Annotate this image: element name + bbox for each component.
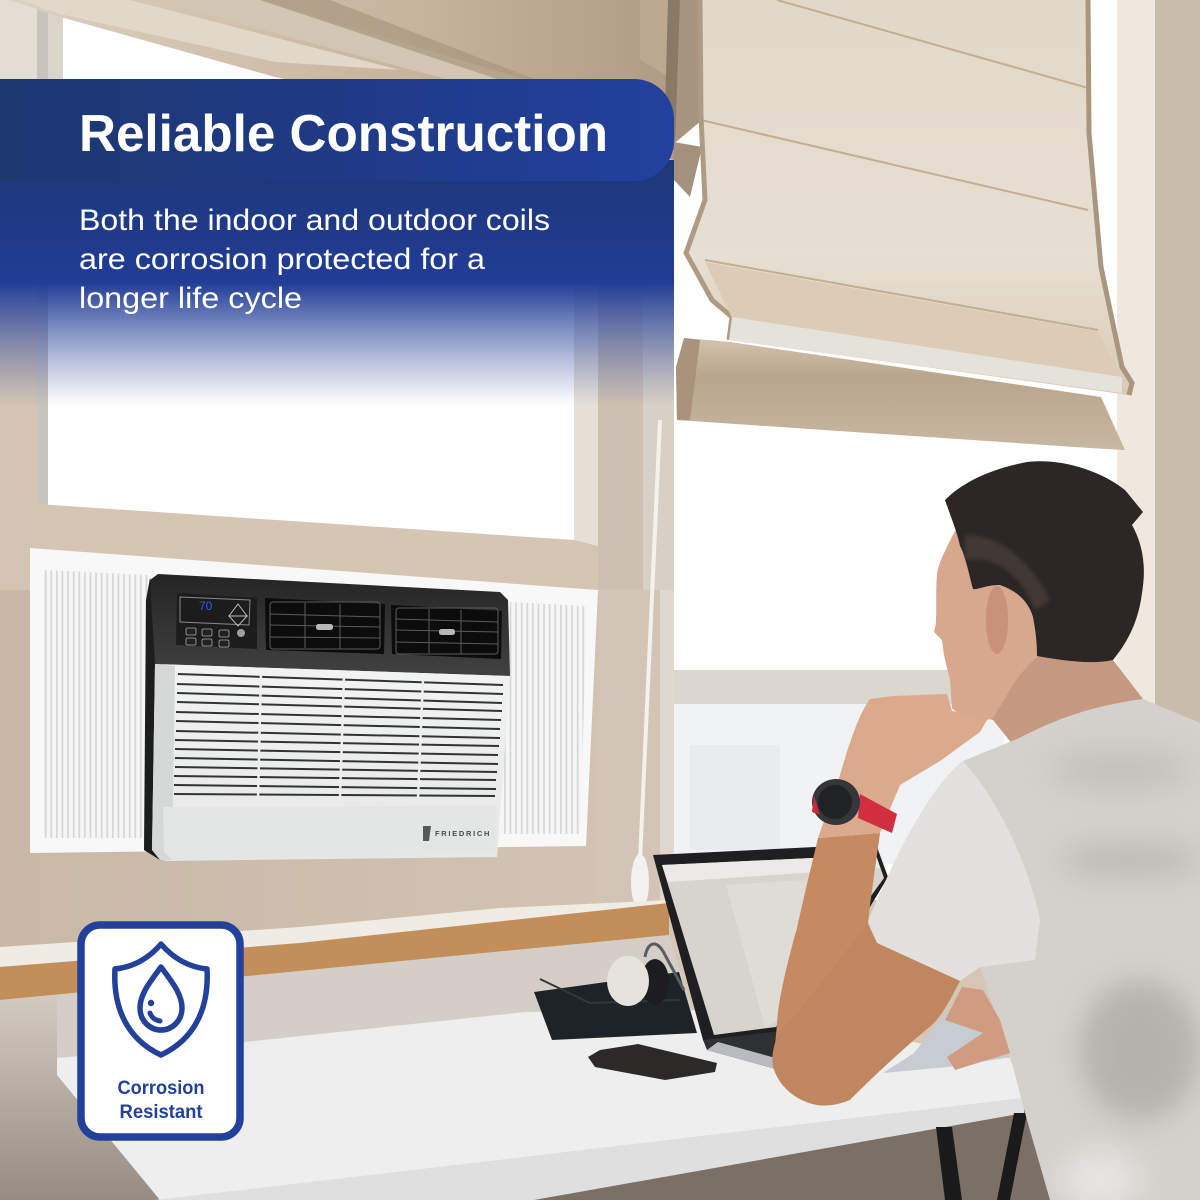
window side panels for air conditioner: [30, 548, 598, 853]
white grille body: [152, 664, 510, 861]
face: [934, 520, 1040, 720]
person: [772, 461, 1200, 1200]
forearm: [773, 833, 880, 1067]
control display: [176, 593, 257, 649]
notebook and headphones: [534, 944, 697, 1040]
under-desk shadow: [500, 1105, 1060, 1200]
hand at chin: [818, 694, 987, 838]
lower front panel: [163, 806, 497, 860]
title bar: [0, 79, 674, 181]
badge label: Corrosion: [118, 1077, 204, 1099]
title: Reliable Construction: [79, 105, 608, 163]
icon: shield with water drop: [115, 944, 207, 1055]
control display: 70: [199, 599, 213, 613]
description text: Both the indoor and outdoor coils: [79, 204, 550, 237]
description text: are corrosion protected for a: [79, 243, 485, 276]
right roman shade: [676, 0, 1132, 450]
left vent: [265, 598, 385, 654]
desk: [57, 1010, 1027, 1200]
wall under ac: [0, 590, 615, 965]
laptop: [653, 847, 1005, 1073]
ear: [986, 586, 1008, 654]
window sill ledge: [0, 900, 720, 1200]
window blind cord: [631, 420, 660, 910]
louver slots: [174, 674, 503, 796]
air conditioner unit: [144, 574, 510, 861]
grille dividers: [258, 672, 423, 798]
hair: [945, 461, 1144, 662]
left roman shade: [10, 0, 702, 197]
badge: corrosion resistant: [81, 925, 240, 1137]
shade seams: [701, 0, 1098, 330]
right window: [674, 0, 1200, 900]
neck: [952, 600, 1143, 750]
shirt: [868, 699, 1200, 1200]
right vent: [391, 605, 502, 659]
description text: [79, 204, 550, 315]
description text: longer life cycle: [79, 282, 302, 315]
phone: [588, 1044, 717, 1080]
shade side borders: [686, 0, 732, 340]
upper arm: [772, 924, 960, 1105]
right hand on laptop: [945, 987, 1010, 1070]
unit side shadow: [144, 578, 172, 860]
badge: corrosion resistant: Resistant: [120, 1101, 203, 1123]
blue fading text panel: [0, 160, 674, 406]
watch: [812, 779, 860, 825]
keyboard deck: [883, 1013, 1005, 1073]
hair highlight: [965, 535, 1050, 610]
logo mark: [423, 826, 431, 841]
brand name: FRIEDRICH: [435, 829, 491, 838]
control panel band: [150, 574, 510, 676]
red watch strap: [858, 794, 897, 833]
desk legs: [936, 1127, 962, 1200]
left window: [0, 0, 674, 610]
